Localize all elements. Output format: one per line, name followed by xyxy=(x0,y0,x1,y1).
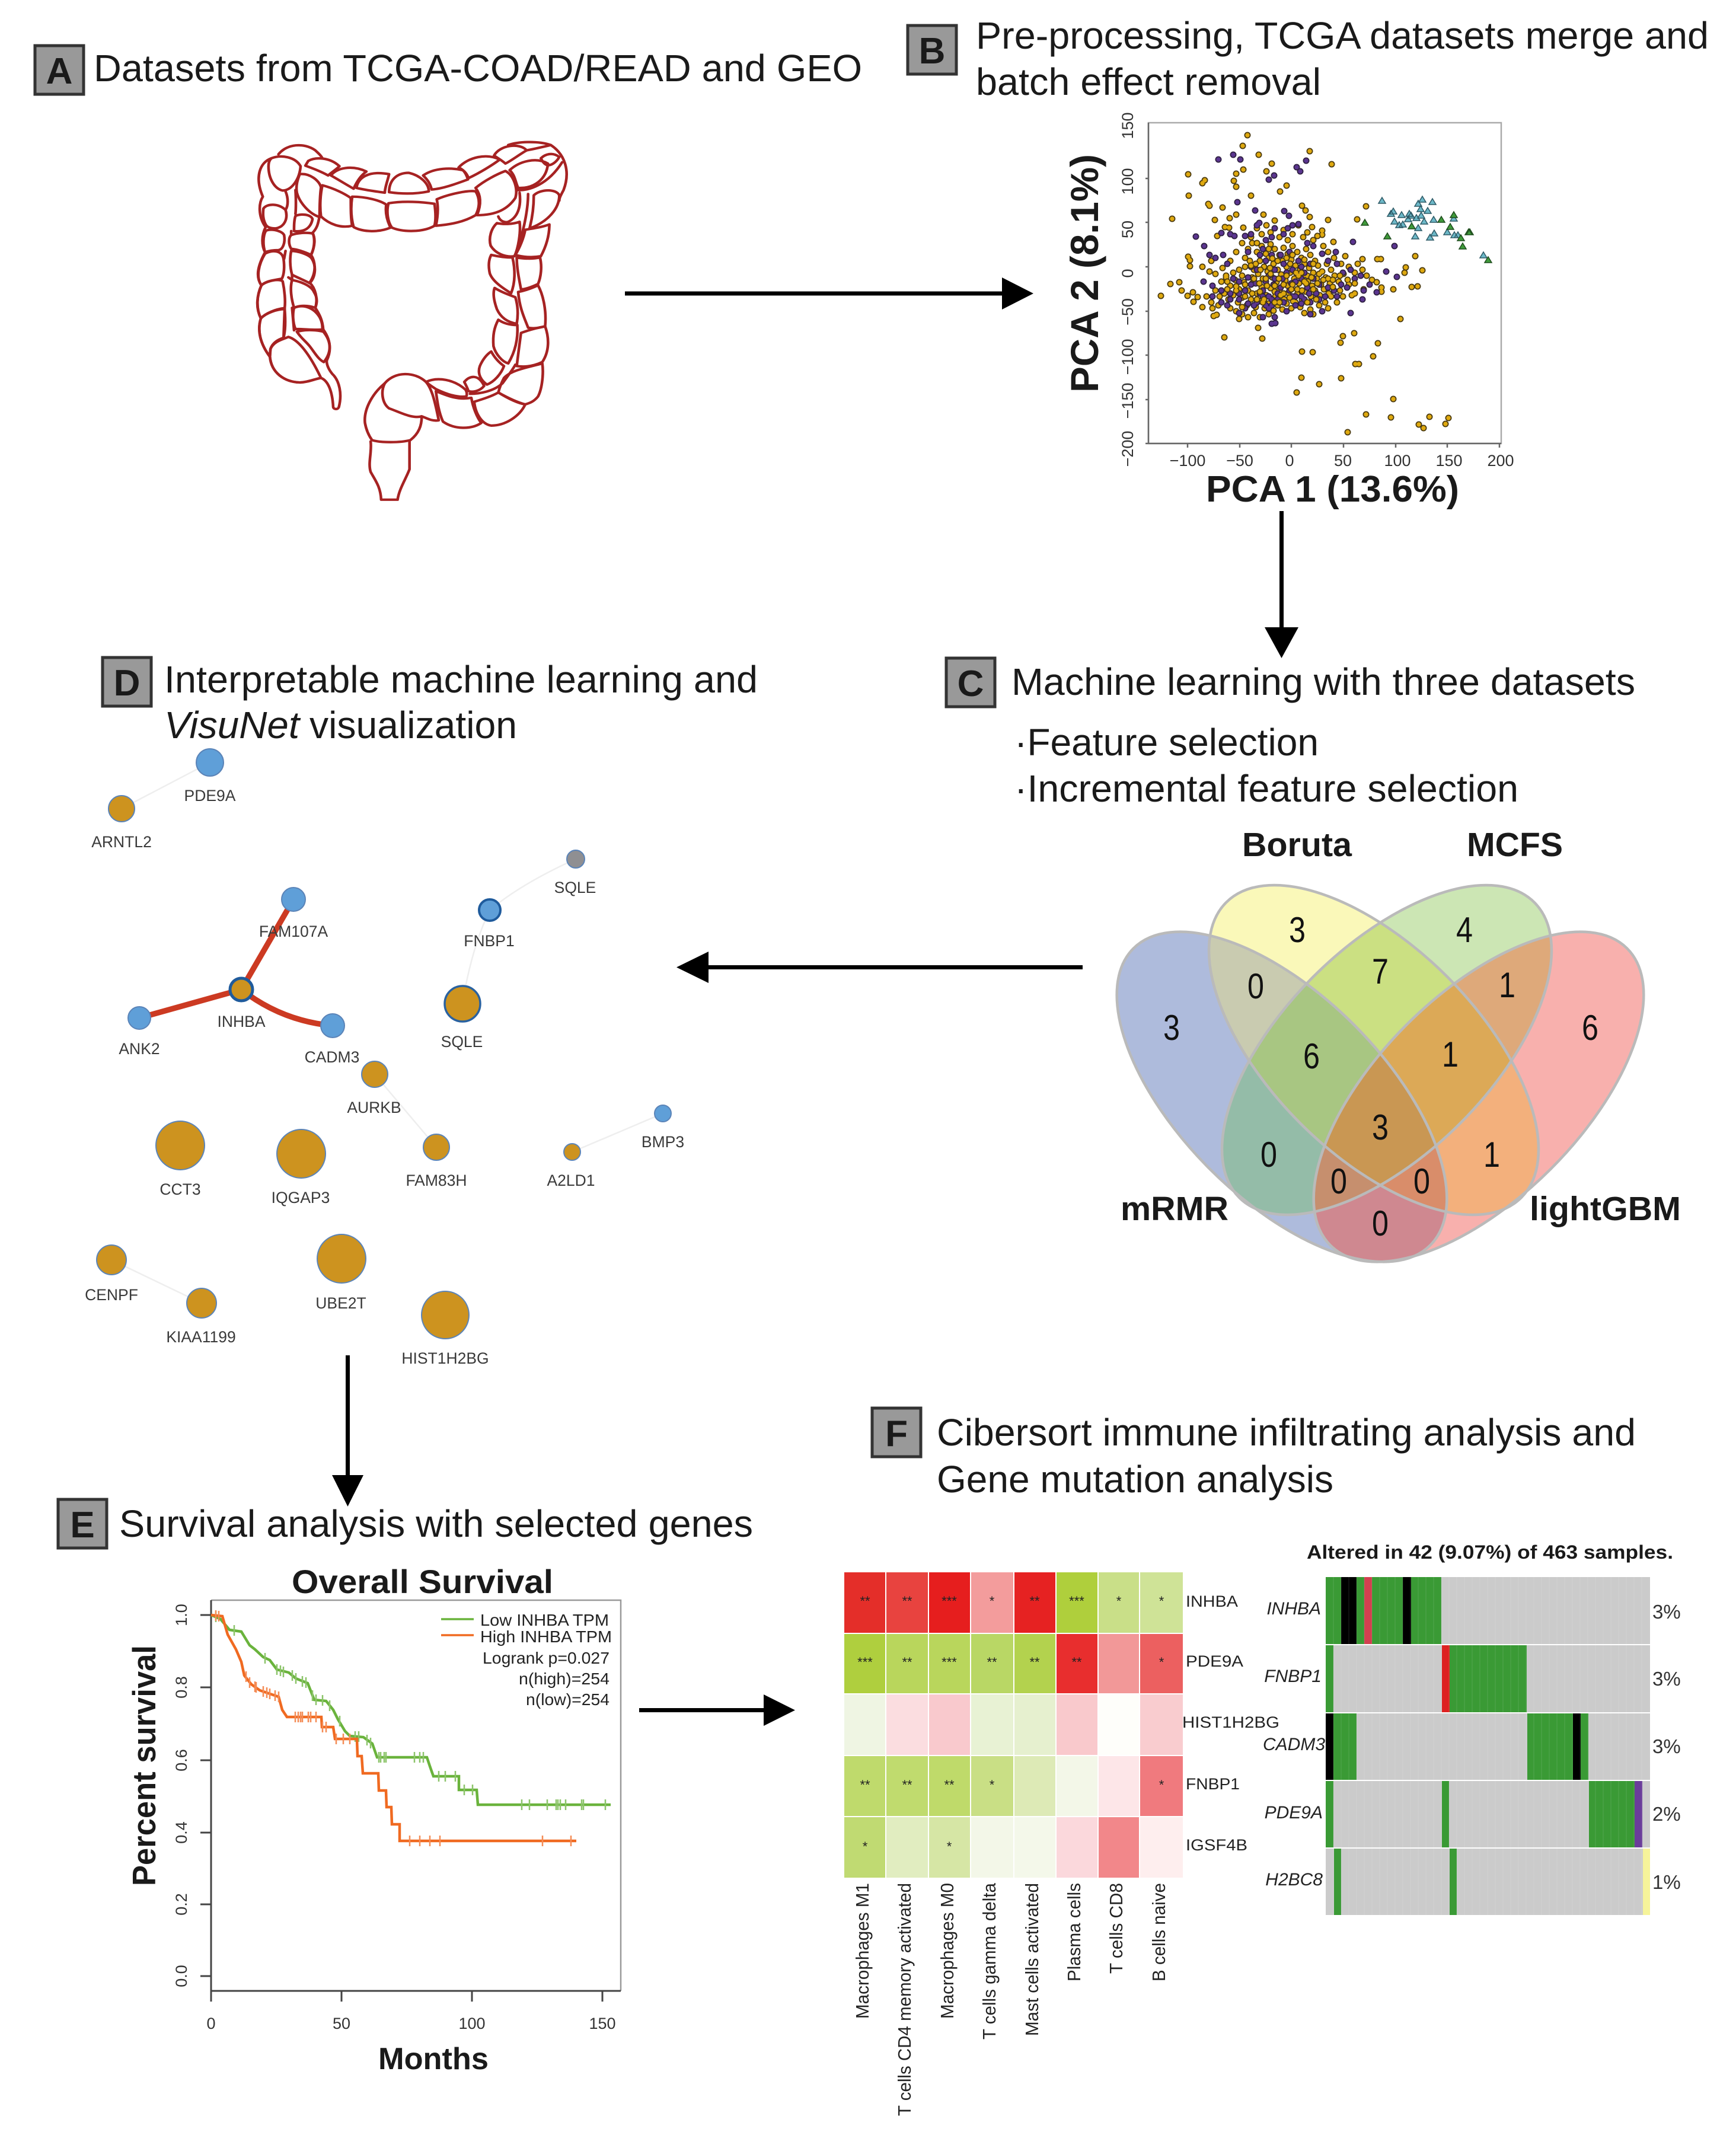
survival axis ticks xyxy=(173,1604,616,2032)
oncoprint gene labels xyxy=(1263,1599,1325,1890)
low INHBA censor marks xyxy=(216,1611,605,1810)
network nodes xyxy=(97,749,671,1339)
heatmap significance stars: ** xyxy=(1029,1655,1040,1670)
panel F heading: Cibersort immune infiltrating analysis and xyxy=(937,1411,1636,1454)
panel A: datasets xyxy=(35,46,862,500)
panel D: VisuNet network xyxy=(85,658,758,1367)
heatmap significance stars: ** xyxy=(860,1594,870,1608)
PCA y tick labels: 0 xyxy=(1119,269,1137,278)
yellow sample points, dense cloud xyxy=(1207,221,1381,317)
oncoprint gene labels: INHBA xyxy=(1266,1599,1321,1619)
heatmap significance stars: * xyxy=(1159,1777,1164,1792)
survival axis ticks: 100 xyxy=(458,2015,486,2032)
panel F heading xyxy=(937,1411,1636,1501)
panel B badge: B xyxy=(919,31,945,72)
panel A badge xyxy=(35,46,84,94)
oncoprint percentages xyxy=(1652,1601,1681,1893)
panel B badge xyxy=(908,25,956,74)
panel B heading: batch effect removal xyxy=(976,60,1321,103)
heatmap gene labels: FNBP1 xyxy=(1186,1775,1240,1793)
arrow: A to B xyxy=(625,277,1033,309)
venn counts: 1 xyxy=(1499,965,1515,1005)
oncoprint gene labels: PDE9A xyxy=(1265,1803,1323,1823)
survival axis ticks: 1.0 xyxy=(173,1604,190,1626)
yellow points over purple xyxy=(1227,243,1355,307)
network gene labels: IQGAP3 xyxy=(272,1189,330,1207)
oncoprint percentages: 2% xyxy=(1652,1803,1681,1825)
panel E badge xyxy=(58,1499,107,1548)
panel B: PCA pre-processing xyxy=(908,14,1709,510)
heatmap gene labels: INHBA xyxy=(1186,1592,1238,1610)
survival legend: Low INHBA TPM xyxy=(480,1611,609,1629)
panel F: immune infiltration and mutation xyxy=(844,1408,1681,2116)
survival axis ticks: 0.2 xyxy=(173,1893,190,1916)
blue triangle samples xyxy=(1378,196,1487,258)
survival axis ticks: 0.0 xyxy=(173,1965,190,1987)
venn set labels: MCFS xyxy=(1467,826,1563,864)
heatmap cell type labels: T cells CD4 memory activated xyxy=(894,1883,915,2116)
network gene labels xyxy=(85,787,684,1367)
survival axis ticks: 0 xyxy=(206,2015,216,2032)
panel A heading: Datasets from TCGA-COAD/READ and GEO xyxy=(94,47,862,90)
purple sample points xyxy=(1196,155,1397,324)
heatmap significance stars: * xyxy=(1159,1655,1164,1670)
heatmap significance stars: * xyxy=(990,1594,995,1608)
panel D heading: Interpretable machine learning and xyxy=(164,658,758,701)
network gene labels: INHBA xyxy=(217,1013,266,1030)
venn counts: 0 xyxy=(1260,1135,1277,1174)
survival legend: n(high)=254 xyxy=(519,1670,609,1688)
venn counts: 6 xyxy=(1303,1036,1320,1076)
venn set labels: mRMR xyxy=(1121,1190,1228,1228)
PCA x tick labels: 150 xyxy=(1435,452,1463,470)
survival legend: n(low)=254 xyxy=(526,1690,609,1709)
survival chart title: Overall Survival xyxy=(292,1563,553,1600)
PCA x tick labels: 200 xyxy=(1487,452,1514,470)
panel D heading: VisuNet xyxy=(164,704,301,746)
panel F badge xyxy=(872,1408,921,1457)
heatmap cell type labels: B cells naive xyxy=(1148,1883,1169,1981)
heatmap significance stars: *** xyxy=(942,1594,957,1608)
low INHBA survival curve xyxy=(211,1615,611,1805)
panel C badge: C xyxy=(958,663,984,704)
network gene labels: CADM3 xyxy=(305,1048,359,1066)
venn counts: 1 xyxy=(1483,1135,1500,1174)
panel B heading: Pre-processing, TCGA datasets merge and xyxy=(976,14,1709,57)
panel C bullets: ·Incremental feature selection xyxy=(1014,767,1518,810)
venn counts: 4 xyxy=(1456,910,1473,950)
oncoprint gene labels: CADM3 xyxy=(1263,1735,1325,1754)
heatmap significance stars: * xyxy=(990,1777,995,1792)
network gene labels: FNBP1 xyxy=(464,932,515,950)
network gene labels: ARNTL2 xyxy=(91,833,152,851)
PCA x tick labels: −100 xyxy=(1170,452,1205,470)
oncoprint gene labels: H2BC8 xyxy=(1265,1870,1323,1890)
panel C heading: Machine learning with three datasets xyxy=(1011,660,1635,703)
PCA x tick labels xyxy=(1170,452,1514,470)
survival legend xyxy=(441,1611,612,1709)
venn counts: 1 xyxy=(1442,1035,1459,1074)
heatmap significance stars: * xyxy=(1116,1594,1122,1608)
heatmap significance stars: *** xyxy=(857,1655,873,1670)
survival axis ticks: 0.8 xyxy=(173,1676,190,1699)
heatmap significance stars: ** xyxy=(860,1777,870,1792)
PCA y tick labels: −200 xyxy=(1119,431,1137,467)
heatmap gene labels: IGSF4B xyxy=(1186,1836,1247,1854)
arrow: B to C xyxy=(1265,511,1298,658)
survival axis ticks: 50 xyxy=(333,2015,350,2032)
icon: colon anatomy outline xyxy=(257,142,567,500)
venn counts: 0 xyxy=(1413,1161,1430,1201)
high INHBA censor marks xyxy=(216,1610,571,1846)
PCA y tick labels: 150 xyxy=(1119,112,1137,139)
oncoprint percentages: 3% xyxy=(1652,1735,1681,1757)
panel E badge: E xyxy=(70,1505,95,1546)
immune correlation heatmap xyxy=(844,1572,1279,2116)
network gene labels: ANK2 xyxy=(119,1040,160,1058)
panel A badge: A xyxy=(46,51,72,92)
PCA y tick labels: 50 xyxy=(1119,221,1137,238)
panel E: survival xyxy=(58,1499,753,2076)
oncoprint percentages: 3% xyxy=(1652,1668,1681,1690)
heatmap significance stars: ** xyxy=(944,1777,955,1792)
panel F badge: F xyxy=(885,1413,908,1454)
oncoprint INHBA alterations xyxy=(1326,1577,1441,1644)
survival axis ticks: 0.6 xyxy=(173,1749,190,1772)
oncoprint percentages: 3% xyxy=(1652,1601,1681,1623)
PCA y tick labels xyxy=(1119,112,1137,467)
heatmap cell type labels: T cells gamma delta xyxy=(979,1882,1000,2040)
venn counts: 6 xyxy=(1582,1008,1598,1048)
network gene labels: BMP3 xyxy=(642,1133,684,1151)
panel F heading: Gene mutation analysis xyxy=(937,1458,1333,1501)
heatmap gene labels: HIST1H2BG xyxy=(1182,1713,1279,1731)
venn counts: 0 xyxy=(1372,1204,1389,1243)
arrow: E to F xyxy=(639,1694,795,1726)
network gene labels: KIAA1199 xyxy=(166,1328,236,1346)
PCA y tick labels: −100 xyxy=(1119,339,1137,375)
panel C: machine learning and venn xyxy=(946,658,1699,1317)
survival axis titles xyxy=(126,1645,489,2076)
oncoprint gene labels: FNBP1 xyxy=(1264,1667,1322,1686)
survival chart xyxy=(126,1563,621,2076)
venn set labels: Boruta xyxy=(1242,826,1352,864)
panel D heading: visualization xyxy=(309,704,517,746)
oncoprint H2BC8 alterations xyxy=(1334,1849,1650,1915)
heatmap significance stars: * xyxy=(1159,1594,1164,1608)
venn counts: 3 xyxy=(1163,1008,1180,1048)
heatmap significance stars: ** xyxy=(902,1777,912,1792)
PCA x tick labels: 50 xyxy=(1334,452,1352,470)
PCA scatter chart xyxy=(1062,112,1514,510)
yellow sample points, outliers xyxy=(1161,135,1448,432)
PCA y tick labels: −150 xyxy=(1119,383,1137,419)
venn counts xyxy=(1163,910,1598,1243)
venn diagram xyxy=(1115,832,1679,1263)
oncoprint PDE9A alterations xyxy=(1326,1781,1642,1847)
heatmap cell type labels: Macrophages M0 xyxy=(937,1883,958,2019)
heatmap significance stars: *** xyxy=(942,1655,957,1670)
panel D badge: D xyxy=(114,663,140,704)
venn counts: 0 xyxy=(1330,1161,1347,1201)
panel C badge xyxy=(946,658,995,707)
heatmap significance stars: ** xyxy=(987,1655,997,1670)
arrow: D to E xyxy=(332,1355,363,1507)
network gene labels: UBE2T xyxy=(315,1294,366,1312)
arrow: C to D xyxy=(676,952,1083,983)
survival legend: Logrank p=0.027 xyxy=(483,1649,609,1667)
network gene labels: FAM107A xyxy=(259,923,328,940)
network gene labels: A2LD1 xyxy=(547,1172,595,1189)
PCA y tick labels: −50 xyxy=(1119,298,1137,325)
network gene labels: SQLE xyxy=(441,1033,483,1051)
PCA axis titles: PCA 1 (13.6%) xyxy=(1206,469,1459,510)
venn set labels: lightGBM xyxy=(1530,1190,1681,1228)
network gene labels: CENPF xyxy=(85,1286,138,1304)
heatmap cell type labels: Plasma cells xyxy=(1064,1883,1084,1981)
heatmap significance stars: ** xyxy=(1029,1594,1040,1608)
network gene labels: AURKB xyxy=(347,1099,401,1116)
network gene labels: SQLE xyxy=(554,879,596,896)
heatmap cell type labels: Mast cells activated xyxy=(1022,1883,1042,2036)
survival axis titles: Months xyxy=(378,2042,489,2076)
network edges xyxy=(111,762,663,1303)
oncoprint CADM3 alterations xyxy=(1326,1713,1588,1780)
survival legend: High INHBA TPM xyxy=(480,1627,612,1646)
oncoprint title: Altered in 42 (9.07%) of 463 samples. xyxy=(1307,1541,1673,1563)
oncoprint background rows xyxy=(1326,1577,1650,1915)
venn counts: 0 xyxy=(1247,966,1264,1006)
oncoprint mutation chart xyxy=(1263,1541,1681,1915)
heatmap significance stars xyxy=(857,1594,1164,1854)
PCA y tick labels: 100 xyxy=(1119,168,1137,195)
panel E heading: Survival analysis with selected genes xyxy=(119,1502,753,1545)
PCA x tick labels: −50 xyxy=(1226,452,1253,470)
oncoprint percentages: 1% xyxy=(1652,1871,1681,1893)
venn counts: 3 xyxy=(1372,1108,1389,1147)
panel B heading xyxy=(976,14,1709,103)
survival axis titles: Percent survival xyxy=(126,1645,162,1886)
panel D heading xyxy=(164,658,758,746)
network gene labels: CCT3 xyxy=(159,1180,201,1198)
network gene labels: PDE9A xyxy=(184,787,236,805)
PCA x tick labels: 100 xyxy=(1384,452,1411,470)
heatmap significance stars: *** xyxy=(1069,1594,1084,1608)
heatmap gene labels xyxy=(1182,1592,1279,1854)
high INHBA survival curve xyxy=(211,1615,576,1841)
network gene labels: FAM83H xyxy=(406,1172,467,1189)
PCA axis titles: PCA 2 (8.1%) xyxy=(1062,154,1106,392)
heatmap significance stars: * xyxy=(947,1839,952,1854)
oncoprint FNBP1 alterations xyxy=(1326,1645,1527,1712)
panel D badge xyxy=(103,658,151,706)
panel C bullets: ·Feature selection xyxy=(1014,721,1319,764)
PCA axis titles xyxy=(1062,154,1459,510)
heatmap significance stars: ** xyxy=(902,1655,912,1670)
heatmap gene labels: PDE9A xyxy=(1186,1652,1243,1670)
heatmap significance stars: ** xyxy=(902,1594,912,1608)
panel C bullets xyxy=(1014,721,1518,810)
venn counts: 3 xyxy=(1289,910,1306,950)
heatmap significance stars: ** xyxy=(1071,1655,1082,1670)
survival axis ticks: 0.4 xyxy=(173,1821,190,1844)
venn set labels xyxy=(1121,826,1681,1228)
green triangle samples xyxy=(1361,212,1492,263)
survival axis ticks: 150 xyxy=(589,2015,616,2032)
PCA x tick labels: 0 xyxy=(1285,452,1294,470)
heatmap cell type labels xyxy=(852,1882,1169,2116)
heatmap cell type labels: Macrophages M1 xyxy=(852,1883,873,2019)
venn counts: 7 xyxy=(1372,952,1389,991)
network gene labels: HIST1H2BG xyxy=(401,1349,489,1367)
heatmap cell type labels: T cells CD8 xyxy=(1106,1883,1127,1974)
heatmap significance stars: * xyxy=(863,1839,868,1854)
